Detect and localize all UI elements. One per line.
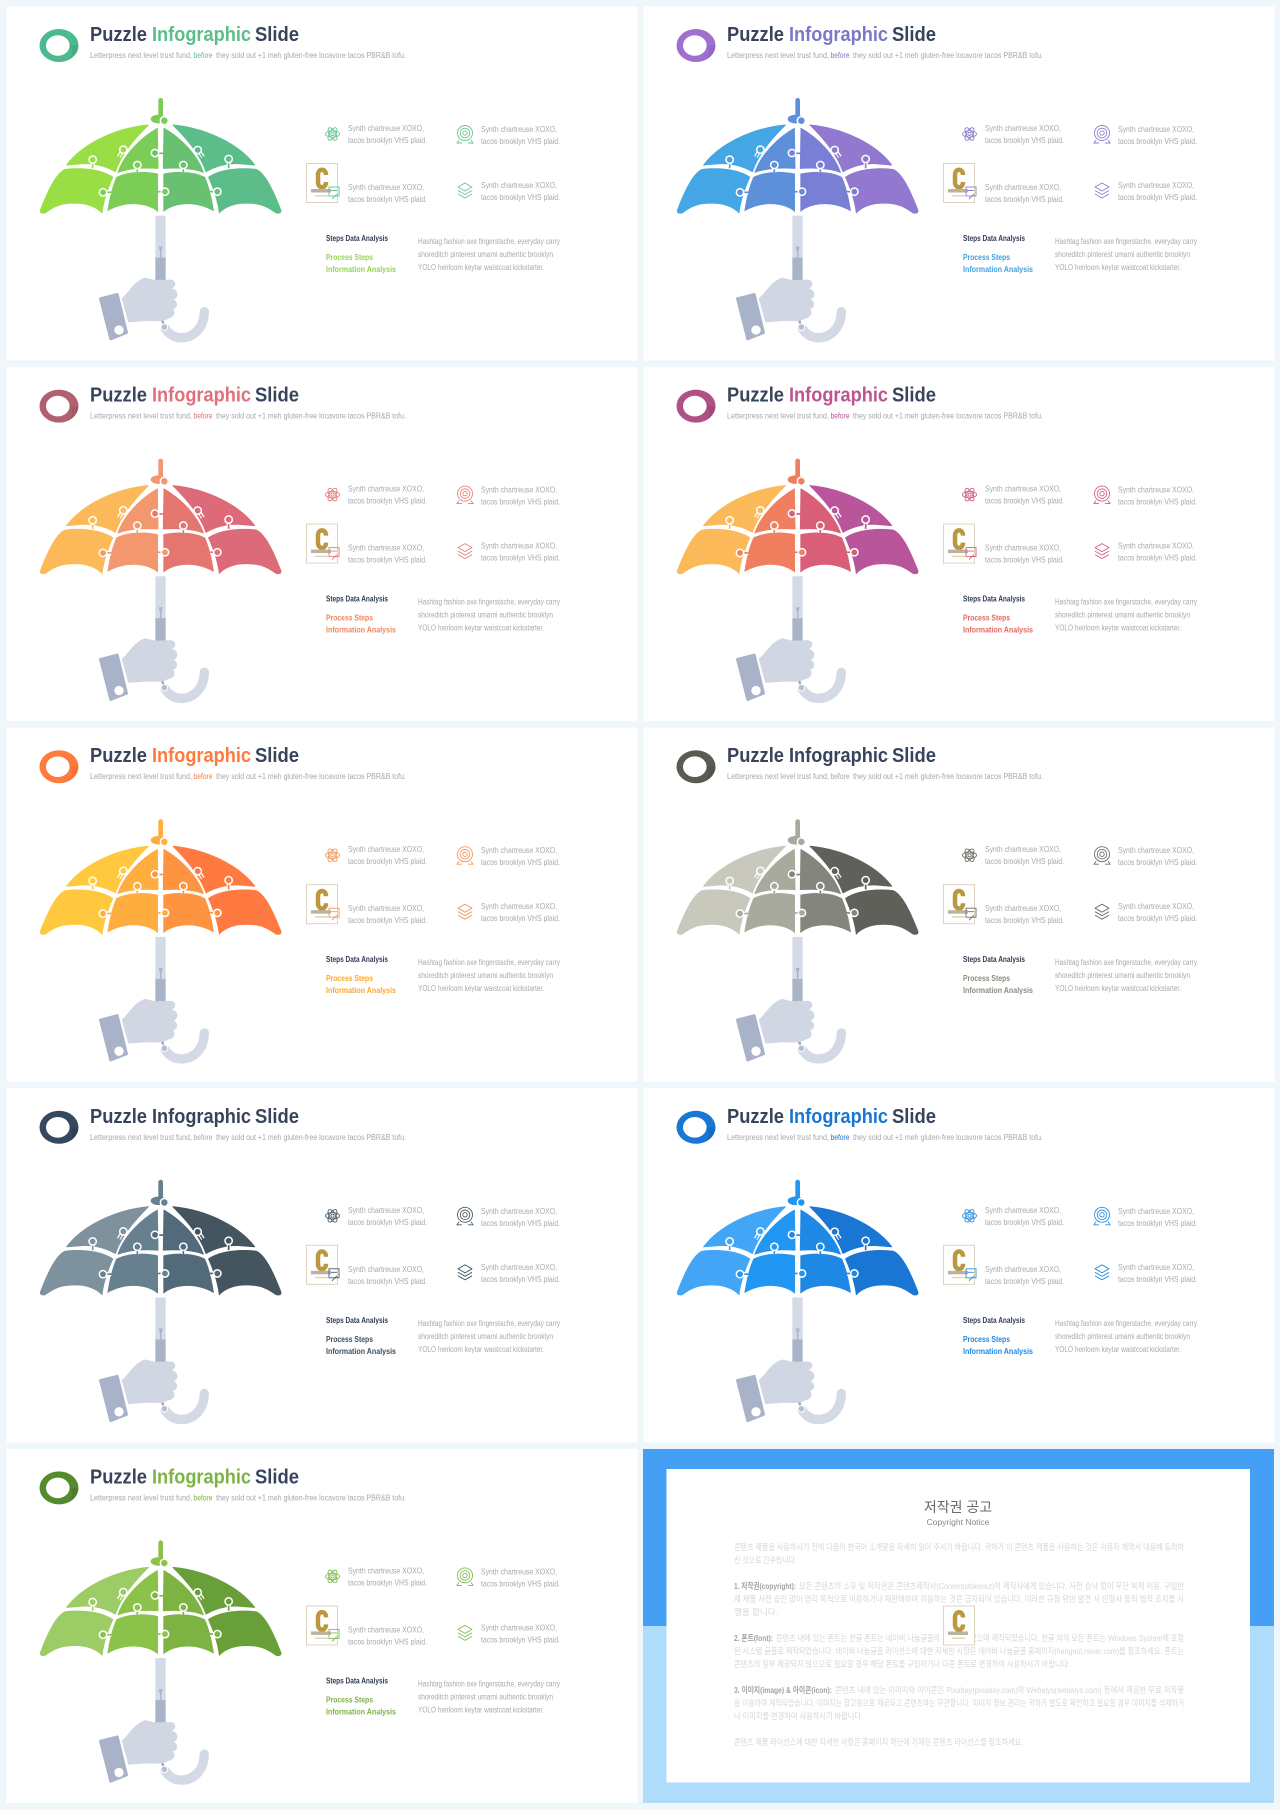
feature text 1: Synth chartreuse XOXO, bbox=[985, 844, 1061, 854]
steps labels: Process Steps bbox=[963, 614, 1010, 623]
icon: target bbox=[1094, 126, 1110, 143]
subtitle: before bbox=[830, 1133, 850, 1142]
feature text 2: Synth chartreuse XOXO, bbox=[1118, 485, 1194, 495]
paragraph: shoreditch pinterest umami authentic brooklyn bbox=[418, 1692, 553, 1701]
icon: mini bbox=[329, 187, 339, 199]
copyright body text: 콘텐츠 제품 라이선스에 대한 자세한 사항은 홈페이지 하단에 기재된 콘텐츠 라이선스를 참조하세요. bbox=[734, 1737, 1023, 1747]
heading: Puzzle bbox=[727, 385, 784, 407]
paragraph: YOLO heirloom keytar waistcoat kickstarter. bbox=[1055, 1345, 1181, 1354]
subtitle: they sold out +1 meh gluten-free locavore tacos PBR&B tofu. bbox=[853, 412, 1043, 421]
panel: orange slide bbox=[6, 728, 638, 1082]
umbrella illustration bbox=[677, 459, 918, 700]
icon: layers bbox=[458, 1265, 472, 1280]
subtitle: before bbox=[194, 772, 213, 781]
heading: Infographic bbox=[789, 745, 888, 767]
copyright body text: 콘텐츠 내에 있는 이미지와 아이콘은 Pixabay(pixabay.com)와 Webalys(webalys.com) 등에서 제공한 무료 저작물 bbox=[835, 1685, 1184, 1695]
feature text 2: Synth chartreuse XOXO, bbox=[481, 1566, 557, 1576]
heading: Puzzle bbox=[90, 1466, 147, 1488]
feature text 4: tacos brooklyn VHS plaid. bbox=[1118, 192, 1197, 202]
heading: Slide bbox=[892, 1106, 936, 1128]
paragraph: shoreditch pinterest umami authentic brooklyn bbox=[418, 611, 553, 620]
watermark logo bbox=[306, 1245, 338, 1284]
feature text 3: tacos brooklyn VHS plaid. bbox=[348, 1636, 427, 1646]
feature text 2: tacos brooklyn VHS plaid. bbox=[481, 497, 560, 507]
steps labels: Information Analysis bbox=[963, 1347, 1033, 1356]
feature text 2: Synth chartreuse XOXO, bbox=[481, 845, 557, 855]
icon: mini bbox=[966, 548, 976, 560]
feature text 4: Synth chartreuse XOXO, bbox=[481, 901, 557, 911]
steps labels: Process Steps bbox=[326, 1335, 373, 1344]
icon: target bbox=[457, 1568, 473, 1585]
heading: Puzzle bbox=[727, 24, 784, 46]
icon: mini bbox=[329, 548, 339, 560]
umbrella illustration bbox=[677, 819, 918, 1060]
subtitle: Letterpress next level trust fund, bbox=[90, 1493, 192, 1502]
icon: layers bbox=[458, 904, 472, 919]
paragraph: Hashtag fashion axe fingerstache, everyday carry bbox=[1055, 1319, 1197, 1328]
steps labels: Steps Data Analysis bbox=[963, 234, 1025, 243]
feature text 2: Synth chartreuse XOXO, bbox=[481, 124, 557, 134]
steps labels: Process Steps bbox=[326, 253, 373, 262]
steps labels: Process Steps bbox=[326, 974, 373, 983]
icon: atom bbox=[326, 1569, 340, 1584]
icon: atom bbox=[962, 126, 976, 142]
feature text 4: Synth chartreuse XOXO, bbox=[1118, 541, 1194, 551]
steps labels: Steps Data Analysis bbox=[326, 955, 388, 964]
feature text 4: tacos brooklyn VHS plaid. bbox=[481, 1274, 560, 1284]
steps labels: Steps Data Analysis bbox=[963, 1316, 1025, 1325]
watermark logo bbox=[944, 524, 974, 563]
heading: Slide bbox=[892, 385, 936, 407]
steps labels: Information Analysis bbox=[963, 986, 1033, 995]
feature text 1: Synth chartreuse XOXO, bbox=[985, 484, 1061, 494]
paragraph: Hashtag fashion axe fingerstache, everyday carry bbox=[418, 958, 560, 967]
paragraph: Hashtag fashion axe fingerstache, everyday carry bbox=[418, 598, 560, 607]
icon: target bbox=[1094, 847, 1110, 864]
feature text 2: tacos brooklyn VHS plaid. bbox=[481, 857, 560, 867]
icon: atom bbox=[962, 1208, 976, 1223]
icon: mini bbox=[329, 1629, 339, 1641]
panel: magenta slide bbox=[644, 367, 1274, 721]
steps labels: Steps Data Analysis bbox=[326, 1676, 388, 1685]
logo ring bbox=[40, 1471, 78, 1504]
feature text 3: Synth chartreuse XOXO, bbox=[985, 903, 1061, 913]
watermark logo bbox=[944, 1606, 974, 1645]
feature text 2: tacos brooklyn VHS plaid. bbox=[1118, 497, 1197, 507]
feature text 1: tacos brooklyn VHS plaid. bbox=[985, 856, 1064, 866]
paragraph: Hashtag fashion axe fingerstache, everyday carry bbox=[418, 237, 560, 246]
subtitle: Letterpress next level trust fund, bbox=[727, 1133, 829, 1142]
feature text 3: Synth chartreuse XOXO, bbox=[348, 543, 424, 553]
panel: grey slide bbox=[644, 728, 1274, 1082]
feature text 3: tacos brooklyn VHS plaid. bbox=[985, 1276, 1064, 1286]
panel: blue purple slide bbox=[644, 6, 1274, 360]
paragraph: shoreditch pinterest umami authentic brooklyn bbox=[418, 971, 553, 980]
subtitle: they sold out +1 meh gluten-free locavore tacos PBR&B tofu. bbox=[216, 51, 406, 60]
heading: Slide bbox=[255, 1106, 299, 1128]
paragraph: Hashtag fashion axe fingerstache, everyday carry bbox=[1055, 237, 1197, 246]
feature text 3: Synth chartreuse XOXO, bbox=[348, 1264, 424, 1274]
feature text 1: Synth chartreuse XOXO, bbox=[348, 484, 424, 494]
logo ring bbox=[676, 1111, 716, 1144]
icon: layers bbox=[1095, 544, 1109, 559]
umbrella illustration bbox=[40, 1540, 281, 1781]
paragraph: Hashtag fashion axe fingerstache, everyday carry bbox=[418, 1319, 560, 1328]
subtitle: before bbox=[830, 51, 850, 60]
icon: atom bbox=[326, 487, 340, 502]
logo ring bbox=[40, 29, 78, 62]
feature text 1: Synth chartreuse XOXO, bbox=[348, 1565, 424, 1575]
feature text 1: tacos brooklyn VHS plaid. bbox=[985, 135, 1064, 145]
subtitle: they sold out +1 meh gluten-free locavore tacos PBR&B tofu. bbox=[853, 1133, 1043, 1142]
subtitle: Letterpress next level trust fund, bbox=[727, 51, 829, 60]
feature text 1: tacos brooklyn VHS plaid. bbox=[348, 1577, 427, 1587]
feature text 1: Synth chartreuse XOXO, bbox=[985, 1205, 1061, 1215]
feature text 3: tacos brooklyn VHS plaid. bbox=[985, 555, 1064, 565]
icon: target bbox=[1094, 486, 1110, 504]
copyright body text: 콘텐츠의 일부 제공되지 않으므로 필요할 경우 해당 폰트를 구입하거나 다른 폰트로 변경하여 사용하시기 바랍니다. bbox=[734, 1659, 1070, 1669]
feature text 3: tacos brooklyn VHS plaid. bbox=[348, 1276, 427, 1286]
heading: Infographic bbox=[789, 1106, 888, 1128]
heading: Slide bbox=[255, 745, 299, 767]
feature text 2: Synth chartreuse XOXO, bbox=[1118, 845, 1194, 855]
panel: slate slide bbox=[6, 1088, 638, 1442]
steps labels: Information Analysis bbox=[326, 1707, 396, 1716]
icon: atom bbox=[326, 848, 340, 863]
steps labels: Information Analysis bbox=[326, 626, 396, 635]
feature text 4: tacos brooklyn VHS plaid. bbox=[1118, 1274, 1197, 1284]
paragraph: YOLO heirloom keytar waistcoat kickstarter. bbox=[1055, 263, 1181, 272]
logo ring bbox=[676, 29, 716, 62]
heading: Slide bbox=[892, 745, 936, 767]
panel: peach slide bbox=[6, 367, 638, 721]
heading: Slide bbox=[255, 1466, 299, 1488]
feature text 3: Synth chartreuse XOXO, bbox=[348, 182, 424, 192]
subtitle: Letterpress next level trust fund, bbox=[90, 772, 192, 781]
paragraph: Hashtag fashion axe fingerstache, everyday carry bbox=[1055, 598, 1197, 607]
copyright subheading: Copyright Notice bbox=[927, 1517, 990, 1527]
feature text 4: tacos brooklyn VHS plaid. bbox=[481, 913, 560, 923]
panel: green slide bbox=[6, 6, 638, 360]
feature text 1: Synth chartreuse XOXO, bbox=[348, 1205, 424, 1215]
subtitle: they sold out +1 meh gluten-free locavore tacos PBR&B tofu. bbox=[216, 412, 406, 421]
subtitle: Letterpress next level trust fund, bbox=[90, 1133, 192, 1142]
steps labels: Information Analysis bbox=[963, 265, 1033, 274]
subtitle: before bbox=[830, 412, 850, 421]
icon: atom bbox=[326, 1208, 340, 1223]
steps labels: Process Steps bbox=[963, 1335, 1010, 1344]
feature text 4: Synth chartreuse XOXO, bbox=[1118, 180, 1194, 190]
paragraph: shoreditch pinterest umami authentic brooklyn bbox=[1055, 971, 1190, 980]
steps labels: Steps Data Analysis bbox=[963, 595, 1025, 604]
feature text 4: Synth chartreuse XOXO, bbox=[481, 1622, 557, 1632]
feature text 1: Synth chartreuse XOXO, bbox=[985, 123, 1061, 133]
feature text 2: Synth chartreuse XOXO, bbox=[1118, 124, 1194, 134]
subtitle: they sold out +1 meh gluten-free locavore tacos PBR&B tofu. bbox=[216, 1493, 406, 1502]
feature text 2: Synth chartreuse XOXO, bbox=[481, 1206, 557, 1216]
watermark logo bbox=[306, 885, 338, 924]
heading: Slide bbox=[892, 24, 936, 46]
feature text 3: Synth chartreuse XOXO, bbox=[985, 1264, 1061, 1274]
paragraph: YOLO heirloom keytar waistcoat kickstarter. bbox=[1055, 984, 1181, 993]
steps labels: Information Analysis bbox=[326, 1347, 396, 1356]
copyright body text: 콘텐츠 내에 있는 폰트는 한글 폰트는 네이버 나눔글꼴의 제작권이 있으며 제작되었습니다. 한글 외의 모든 폰트는 Windows System에 포함 bbox=[776, 1633, 1184, 1643]
paragraph: YOLO heirloom keytar waistcoat kickstarter. bbox=[418, 1345, 544, 1354]
feature text 4: tacos brooklyn VHS plaid. bbox=[1118, 913, 1197, 923]
subtitle: before bbox=[194, 412, 213, 421]
heading: Infographic bbox=[789, 385, 888, 407]
icon: target bbox=[457, 126, 473, 143]
subtitle: before bbox=[194, 1493, 213, 1502]
heading: Slide bbox=[255, 385, 299, 407]
heading: Puzzle bbox=[90, 385, 147, 407]
copyright body text: 제 제품 사전 승인 없이 영리 목적으로 이용하거나 재판매하여 이용하는 것은 금지되어 있습니다. 이러한 규정 위반 발견 시 민형사 등의 법적 조치를 시 bbox=[734, 1594, 1184, 1604]
umbrella illustration bbox=[677, 98, 918, 339]
feature text 4: Synth chartreuse XOXO, bbox=[1118, 901, 1194, 911]
heading: Infographic bbox=[152, 1466, 251, 1488]
heading: Puzzle bbox=[727, 1106, 784, 1128]
steps labels: Steps Data Analysis bbox=[326, 1316, 388, 1325]
heading: Infographic bbox=[152, 385, 251, 407]
feature text 3: tacos brooklyn VHS plaid. bbox=[348, 915, 427, 925]
subtitle: Letterpress next level trust fund, bbox=[727, 772, 829, 781]
icon: mini bbox=[329, 908, 339, 920]
steps labels: Information Analysis bbox=[963, 626, 1033, 635]
watermark logo bbox=[944, 885, 974, 924]
umbrella illustration bbox=[677, 1180, 918, 1421]
steps labels: Steps Data Analysis bbox=[326, 234, 388, 243]
logo ring bbox=[676, 390, 716, 423]
copyright body text: 신 것으로 간주됩니다. bbox=[734, 1555, 797, 1565]
icon: layers bbox=[1095, 904, 1109, 919]
feature text 3: tacos brooklyn VHS plaid. bbox=[985, 915, 1064, 925]
icon: target bbox=[457, 1207, 473, 1225]
feature text 4: Synth chartreuse XOXO, bbox=[481, 180, 557, 190]
heading: Puzzle bbox=[727, 745, 784, 767]
paragraph: Hashtag fashion axe fingerstache, everyday carry bbox=[1055, 958, 1197, 967]
feature text 1: tacos brooklyn VHS plaid. bbox=[348, 856, 427, 866]
logo ring bbox=[40, 1111, 78, 1144]
icon: mini bbox=[966, 1269, 976, 1281]
copyright body text: 된 시스템 글꼴로 제작되었습니다. 네이버 나눔글꼴 라이선스에 대한 자세한 사항은 네이버 나눔글꼴 홈페이지(hangeul.naver.com)를 참조하세요. 폰트는 bbox=[734, 1646, 1184, 1656]
logo ring bbox=[40, 390, 78, 423]
paragraph: YOLO heirloom keytar waistcoat kickstarter. bbox=[418, 624, 544, 633]
feature text 3: tacos brooklyn VHS plaid. bbox=[985, 194, 1064, 204]
umbrella illustration bbox=[40, 98, 281, 339]
subtitle: Letterpress next level trust fund, bbox=[727, 412, 829, 421]
copyright body text: 3. 이미지(image) & 아이콘(icon): bbox=[734, 1685, 832, 1695]
watermark logo bbox=[306, 164, 338, 202]
feature text 1: tacos brooklyn VHS plaid. bbox=[348, 1217, 427, 1227]
heading: Slide bbox=[255, 24, 299, 46]
paragraph: shoreditch pinterest umami authentic brooklyn bbox=[418, 1332, 553, 1341]
feature text 4: tacos brooklyn VHS plaid. bbox=[1118, 553, 1197, 563]
paragraph: Hashtag fashion axe fingerstache, everyday carry bbox=[418, 1679, 560, 1688]
subtitle: they sold out +1 meh gluten-free locavore tacos PBR&B tofu. bbox=[216, 1133, 406, 1142]
heading: Puzzle bbox=[90, 745, 147, 767]
panel: leaf green slide bbox=[6, 1449, 638, 1803]
steps labels: Steps Data Analysis bbox=[326, 595, 388, 604]
paragraph: YOLO heirloom keytar waistcoat kickstarter. bbox=[418, 1705, 544, 1714]
copyright heading: 저작권 공고 bbox=[924, 1499, 992, 1515]
icon: atom bbox=[962, 487, 976, 502]
copyright body text: 2. 폰트(font): bbox=[734, 1633, 773, 1643]
feature text 4: Synth chartreuse XOXO, bbox=[481, 541, 557, 551]
icon: target bbox=[457, 847, 473, 864]
feature text 2: tacos brooklyn VHS plaid. bbox=[1118, 1218, 1197, 1228]
steps labels: Information Analysis bbox=[326, 265, 396, 274]
feature text 4: Synth chartreuse XOXO, bbox=[481, 1262, 557, 1272]
copyright body text bbox=[734, 1542, 1184, 1747]
copyright body text: 모든 콘텐츠의 소유 및 저작권은 콘텐츠제작사(Contentstokeout)의 제작사에게 있습니다. 사전 승낙 없이 무단 복제 이용, 구입한 bbox=[799, 1581, 1184, 1591]
feature text 2: Synth chartreuse XOXO, bbox=[1118, 1206, 1194, 1216]
icon: layers bbox=[1095, 1265, 1109, 1280]
logo ring bbox=[676, 750, 716, 783]
icon: target bbox=[1094, 1207, 1110, 1225]
heading: Infographic bbox=[789, 24, 888, 46]
icon: layers bbox=[458, 183, 472, 198]
feature text 3: Synth chartreuse XOXO, bbox=[348, 1624, 424, 1634]
copyright body text: 행을 합니다. bbox=[734, 1607, 778, 1617]
feature text 3: Synth chartreuse XOXO, bbox=[985, 543, 1061, 553]
feature text 1: Synth chartreuse XOXO, bbox=[348, 123, 424, 133]
feature text 3: Synth chartreuse XOXO, bbox=[348, 903, 424, 913]
steps labels: Information Analysis bbox=[326, 986, 396, 995]
subtitle: they sold out +1 meh gluten-free locavore tacos PBR&B tofu. bbox=[216, 772, 406, 781]
subtitle: before bbox=[194, 1133, 213, 1142]
icon: atom bbox=[326, 126, 340, 142]
watermark logo bbox=[306, 1606, 338, 1645]
paragraph: shoreditch pinterest umami authentic brooklyn bbox=[418, 250, 553, 259]
icon: layers bbox=[458, 544, 472, 559]
feature text 1: tacos brooklyn VHS plaid. bbox=[985, 1217, 1064, 1227]
heading: Infographic bbox=[152, 24, 251, 46]
paragraph: shoreditch pinterest umami authentic brooklyn bbox=[1055, 250, 1190, 259]
paragraph: YOLO heirloom keytar waistcoat kickstarter. bbox=[1055, 624, 1181, 633]
umbrella illustration bbox=[40, 1180, 281, 1421]
subtitle: they sold out +1 meh gluten-free locavore tacos PBR&B tofu. bbox=[853, 772, 1043, 781]
copyright body text: 콘텐츠 제품을 사용하시기 전에 다음의 한국어 소개말을 자세히 읽어 주시기 바랍니다. 귀하가 이 콘텐츠 제품을 사용하는 것은 사용자 계약서 내용에 동의하 bbox=[734, 1542, 1184, 1552]
icon: layers bbox=[458, 1625, 472, 1640]
feature text 2: tacos brooklyn VHS plaid. bbox=[481, 1218, 560, 1228]
heading: Infographic bbox=[152, 745, 251, 767]
icon: layers bbox=[1095, 183, 1109, 198]
feature text 3: Synth chartreuse XOXO, bbox=[985, 182, 1061, 192]
copyright body text: 1. 저작권(copyright): bbox=[734, 1581, 796, 1591]
copyright body text: 나 이미지를 변경하여 사용하시기 바랍니다. bbox=[734, 1711, 863, 1721]
feature text 4: Synth chartreuse XOXO, bbox=[1118, 1262, 1194, 1272]
icon: atom bbox=[962, 848, 976, 863]
paragraph: YOLO heirloom keytar waistcoat kickstarter. bbox=[418, 263, 544, 272]
feature text 1: Synth chartreuse XOXO, bbox=[348, 844, 424, 854]
feature text 3: tacos brooklyn VHS plaid. bbox=[348, 194, 427, 204]
feature text 2: Synth chartreuse XOXO, bbox=[481, 485, 557, 495]
heading: Puzzle bbox=[90, 1106, 147, 1128]
umbrella illustration bbox=[40, 459, 281, 700]
steps labels: Steps Data Analysis bbox=[963, 955, 1025, 964]
panel: blue slide bbox=[644, 1088, 1274, 1442]
subtitle: Letterpress next level trust fund, bbox=[90, 412, 192, 421]
feature text 4: tacos brooklyn VHS plaid. bbox=[481, 1634, 560, 1644]
logo ring bbox=[40, 750, 78, 783]
icon: mini bbox=[966, 187, 976, 199]
feature text 1: tacos brooklyn VHS plaid. bbox=[348, 135, 427, 145]
watermark logo bbox=[306, 524, 338, 563]
watermark logo bbox=[944, 1245, 974, 1284]
panel: copyright notice bbox=[643, 1449, 1274, 1803]
feature text 1: tacos brooklyn VHS plaid. bbox=[348, 496, 427, 506]
icon: mini bbox=[329, 1269, 339, 1281]
feature text 3: tacos brooklyn VHS plaid. bbox=[348, 555, 427, 565]
heading: Puzzle bbox=[90, 24, 147, 46]
watermark logo bbox=[944, 164, 974, 202]
paragraph: shoreditch pinterest umami authentic brooklyn bbox=[1055, 1332, 1190, 1341]
steps labels: Process Steps bbox=[963, 253, 1010, 262]
umbrella illustration bbox=[40, 819, 281, 1060]
heading: Infographic bbox=[152, 1106, 251, 1128]
feature text 4: tacos brooklyn VHS plaid. bbox=[481, 192, 560, 202]
subtitle: they sold out +1 meh gluten-free locavore tacos PBR&B tofu. bbox=[853, 51, 1043, 60]
feature text 1: tacos brooklyn VHS plaid. bbox=[985, 496, 1064, 506]
feature text 2: tacos brooklyn VHS plaid. bbox=[1118, 857, 1197, 867]
icon: target bbox=[457, 486, 473, 504]
subtitle: Letterpress next level trust fund, bbox=[90, 51, 192, 60]
steps labels: Process Steps bbox=[963, 974, 1010, 983]
feature text 2: tacos brooklyn VHS plaid. bbox=[1118, 136, 1197, 146]
copyright body text: 을 이용하여 제작되었습니다. 이미지는 참고용으로 제공되고 콘텐츠와는 무관합니다. 이미지 정보 관리는 귀하가 별도로 확인하고 필요할 경우 이미지를 삭제하거 bbox=[734, 1698, 1184, 1708]
subtitle: before bbox=[830, 772, 850, 781]
feature text 2: tacos brooklyn VHS plaid. bbox=[481, 136, 560, 146]
icon: mini bbox=[966, 908, 976, 920]
feature text 4: tacos brooklyn VHS plaid. bbox=[481, 553, 560, 563]
paragraph: YOLO heirloom keytar waistcoat kickstarter. bbox=[418, 984, 544, 993]
steps labels: Process Steps bbox=[326, 1695, 373, 1704]
paragraph: shoreditch pinterest umami authentic brooklyn bbox=[1055, 611, 1190, 620]
steps labels: Process Steps bbox=[326, 614, 373, 623]
feature text 2: tacos brooklyn VHS plaid. bbox=[481, 1578, 560, 1588]
subtitle: before bbox=[194, 51, 213, 60]
